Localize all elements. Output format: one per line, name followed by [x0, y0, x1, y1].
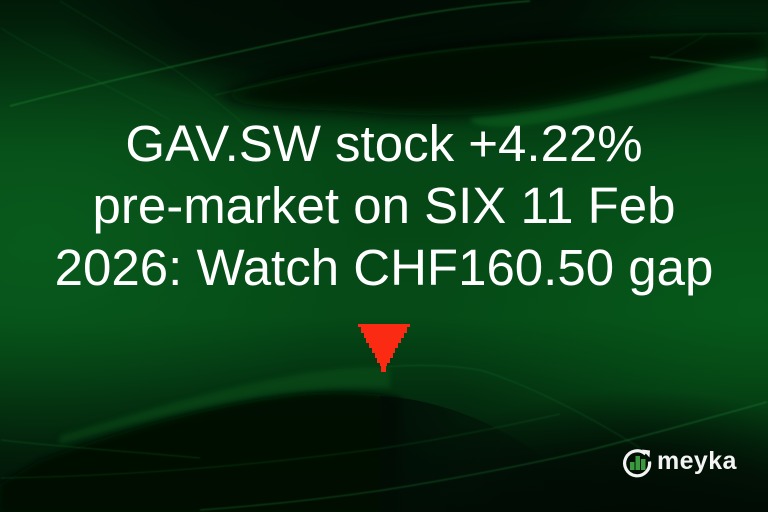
logo mark [622, 449, 652, 478]
bright ribbon upper right [470, 57, 768, 127]
title [55, 115, 713, 296]
upper dark lens [215, 33, 768, 115]
title: 2026: Watch CHF160.50 gap [55, 239, 713, 296]
top dark wash [60, 0, 680, 115]
logo: meyka [622, 447, 737, 478]
lower dark mass [0, 392, 400, 512]
icon: red down arrow [358, 324, 410, 372]
logo wordmark: meyka [657, 447, 737, 475]
title: GAV.SW stock +4.22% [125, 115, 643, 172]
lower left ribbon [60, 367, 390, 444]
title: pre-market on SIX 11 Feb [92, 177, 676, 234]
